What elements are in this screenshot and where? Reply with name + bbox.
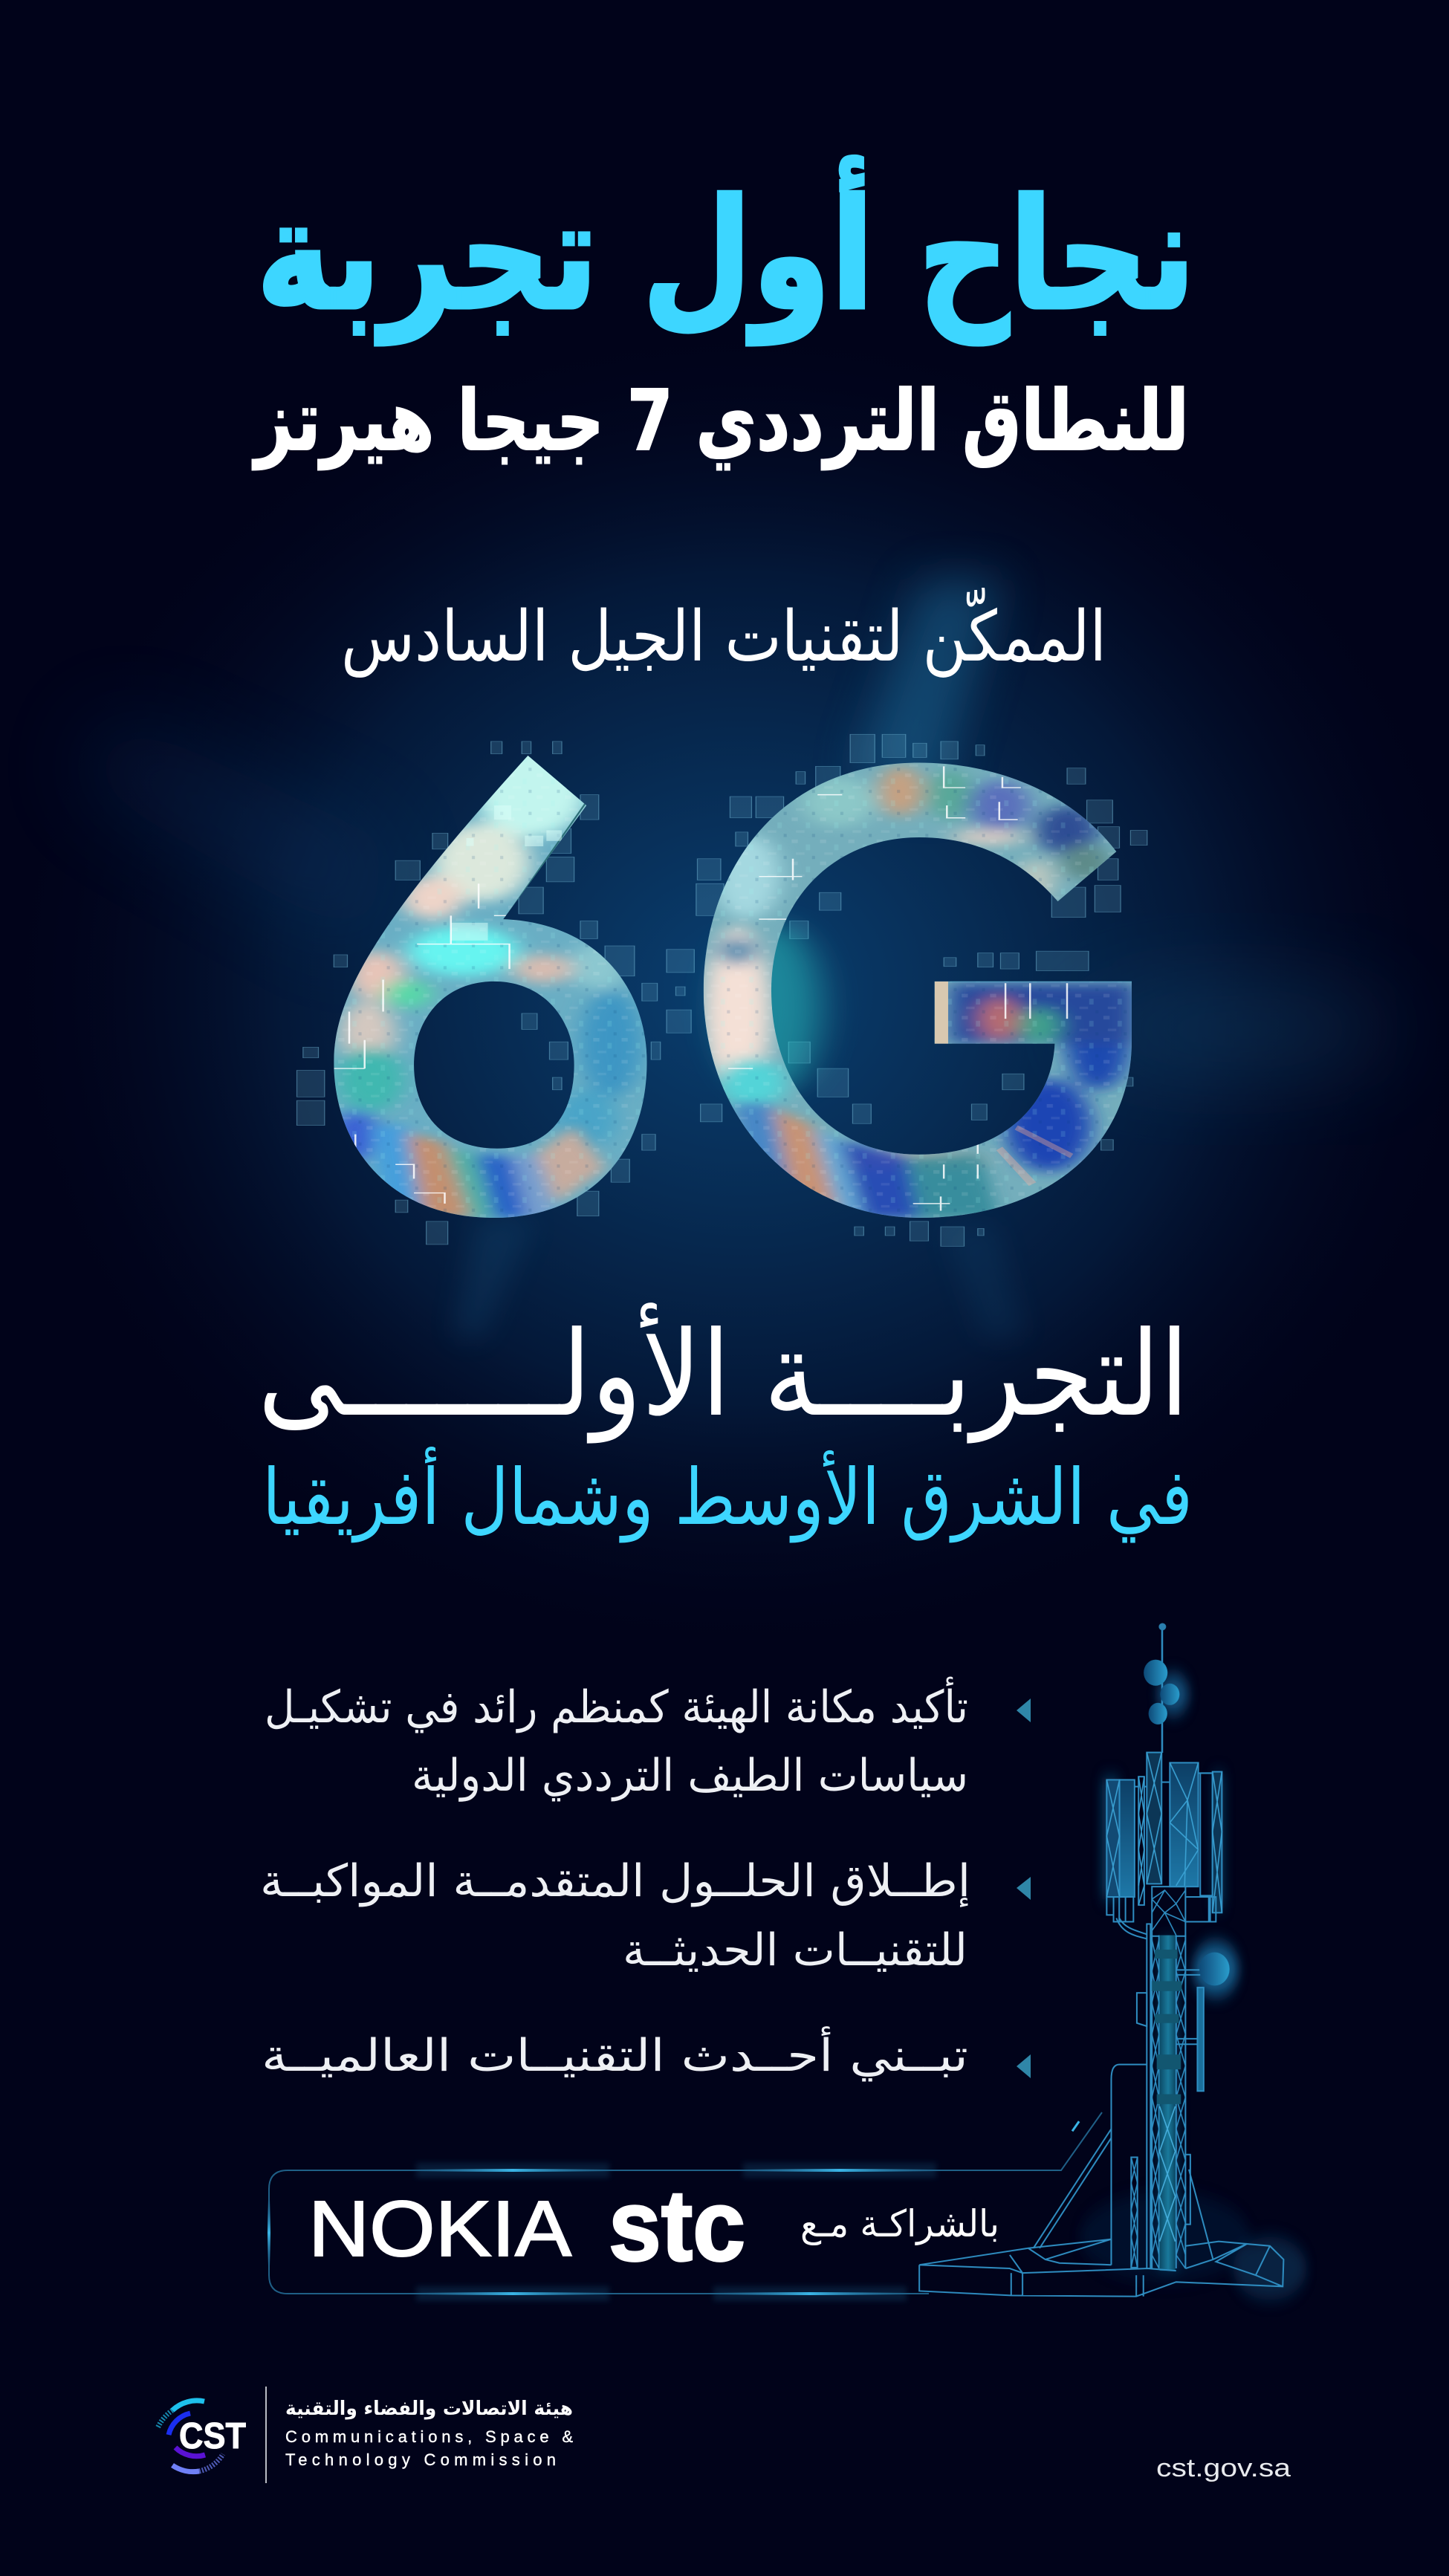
cable box and struts [1111,2065,1147,2265]
digital squares [297,734,1147,1246]
bullet 2: للتقنيــات الحديثــة [623,1924,967,1976]
enabling line: الممكّن لتقنيات الجيل السادس [341,588,1106,678]
CST name: Technology Commission [285,2450,556,2469]
bullet 1 [265,1676,1031,1802]
6G graphic [297,734,1147,1246]
logo: Nokia: NOKIA [308,2185,571,2273]
CST logo: CST [179,2416,246,2456]
holographic bands G [734,1104,999,1218]
letter G [691,756,1147,1225]
tower glow [1080,1674,1307,2300]
heading: first trial: التجربــــة الأولـــــــى [258,1302,1189,1444]
base [919,2239,1283,2297]
glow between letters [722,923,820,1094]
bullet list [260,1676,1031,2082]
tower upper mesh [1152,1886,1185,1936]
digit 6 [334,756,646,1218]
side antenna [1176,2039,1197,2044]
tower lattice [1147,1924,1185,2268]
side dish [1176,1970,1200,1975]
partner label: بالشراكـة مـع [800,2202,999,2246]
tower illustration [919,1623,1307,2300]
bullet 3: تبــني أحــدث التقنيــات العالميــة [262,2026,968,2082]
bullet 1: سياسات الطيف الترددي الدولية [412,1750,968,1802]
title: نجاح أول تجربة [256,156,1196,345]
logo divider [265,2387,267,2483]
CST name: هيئة الاتصالات والفضاء والتقنية [285,2398,573,2420]
dishes [1144,1660,1167,1686]
bullet 2: إطــلاق الحلــول المتقدمــة المواكبــة [260,1855,970,1907]
partner frame [268,2112,1102,2301]
mast [1161,1629,1163,1753]
antenna panels [1106,1779,1120,1897]
CST name [285,2398,573,2469]
bullet 2 [260,1855,1031,1976]
website: cst.gov.sa [1156,2454,1291,2482]
bullet 1: تأكيد مكانة الهيئة كمنظم رائد في تشكيـل [265,1676,968,1733]
subheading: region: في الشرق الأوسط وشمال أفريقيا [262,1447,1193,1543]
holographic bands 6 [371,1126,605,1218]
subtitle: للنطاق الترددي 7 جيجا هيرتز [252,373,1189,470]
CST logo [158,2401,246,2472]
central cylinder [1160,1936,1176,2271]
logo: stc: stc [609,2169,745,2282]
CST name: Communications, Space & [285,2427,573,2446]
